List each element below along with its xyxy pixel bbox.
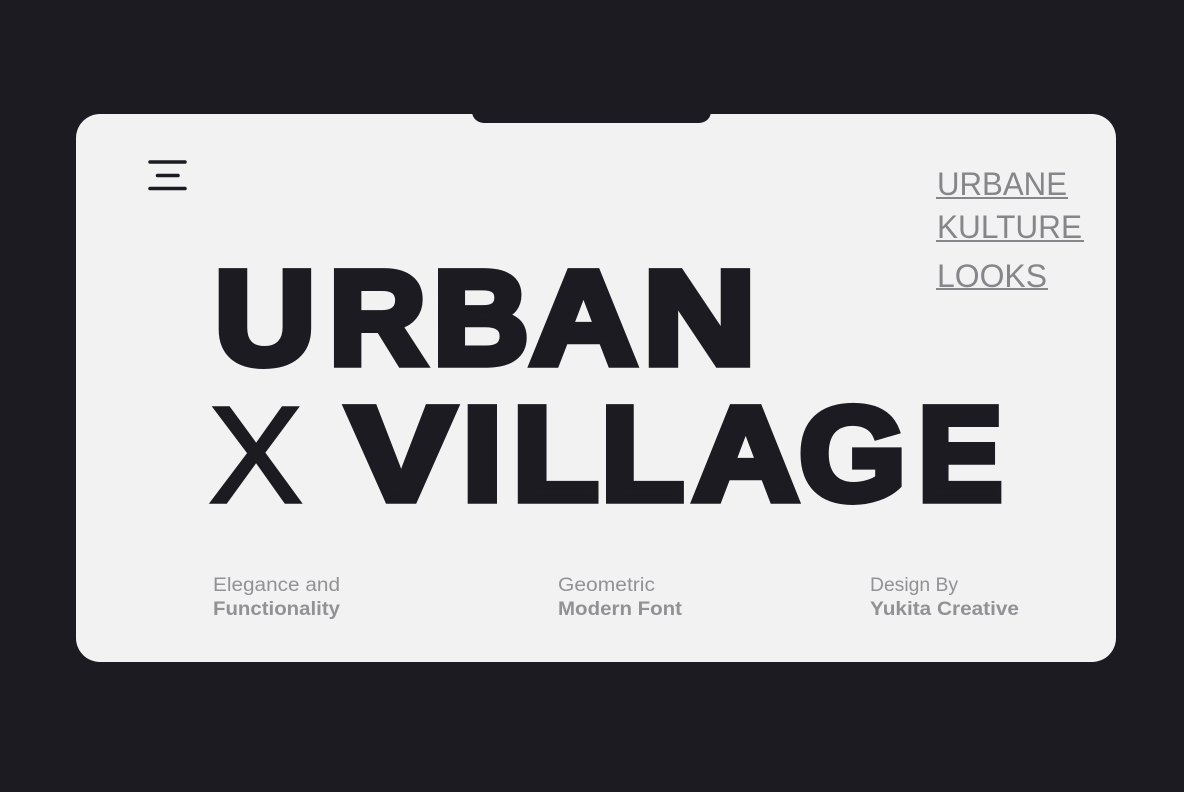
title word: x: X [208,378,303,532]
caption: elegance and functionality: Elegance and [213,575,340,596]
title word: village: A [693,381,799,529]
title line: urban: U [214,245,316,393]
panel: main card [76,114,1116,662]
caption: geometric modern font: Modern Font [558,599,683,620]
title line: urban: B [433,245,529,393]
link: urbane: URBANE [937,166,1067,202]
caption: design by yukita creative [870,575,1019,620]
caption: design by yukita creative: Yukita Creative [870,599,1019,620]
caption: geometric modern font [558,575,683,620]
caption: geometric modern font: Geometric [558,575,655,596]
caption: design by yukita creative: Design By [870,575,958,596]
title line: urban: A [530,245,637,393]
link: kulture: KULTURE [937,209,1082,245]
title [208,245,1002,532]
title line: urban: R [329,245,426,393]
top notch [472,110,711,123]
caption: elegance and functionality: Functionality [213,599,340,620]
title word: village: E [918,381,1002,529]
title word: village: L [601,381,684,529]
title word: village [348,381,1002,529]
title line: urban: N [643,245,756,393]
caption: elegance and functionality [213,575,340,620]
icon: menu [150,162,185,188]
title word: village: V [348,381,454,529]
title word: village: G [799,381,906,529]
title word: village: L [513,381,599,529]
top-right link list [936,166,1084,294]
title word: village: I [462,381,502,529]
link: looks: LOOKS [937,258,1047,294]
title line: urban [214,245,756,393]
